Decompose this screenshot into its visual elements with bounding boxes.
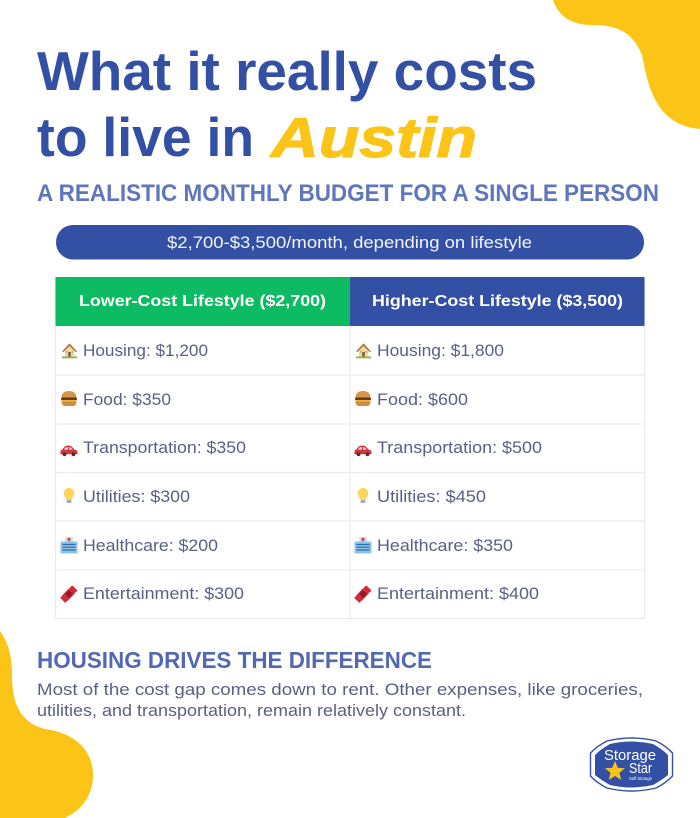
header: lower-cost lifestyle: [56, 277, 350, 326]
table body frame: [55, 278, 645, 619]
budget range pill: $2,700-$3,500/month, depending on lifestyle: [167, 233, 532, 252]
row: transportation higher: Transportation: $500: [377, 438, 542, 457]
body text: utilities, and transportation, remain relatively constant.: [37, 701, 466, 720]
row: utilities lower: Utilities: $300: [83, 487, 190, 506]
header: higher-cost lifestyle: Higher-Cost Lifestyle ($3,500): [372, 293, 623, 310]
logo: Storage Star: Self Storage: [629, 776, 652, 781]
body text: Most of the cost gap comes down to rent. Other expenses, like groceries,: [37, 680, 643, 699]
row: healthcare lower: Healthcare: $200: [83, 536, 218, 555]
decorative blob: bottom left: [0, 631, 93, 818]
title: Austin: [269, 106, 477, 169]
header: lower-cost lifestyle: Lower-Cost Lifestyle ($2,700): [79, 293, 326, 310]
row: housing higher: Housing: $1,800: [377, 341, 504, 360]
decorative blob: top right: [553, 0, 700, 129]
row: healthcare higher: Healthcare: $350: [377, 536, 513, 555]
comparison table: [55, 277, 645, 619]
logo: Storage Star: Storage: [604, 747, 656, 764]
row: food lower: Food: $350: [83, 390, 171, 409]
header: higher-cost lifestyle: [350, 277, 644, 326]
subtitle: A REALISTIC MONTHLY BUDGET FOR A SINGLE PERSON: [37, 180, 659, 207]
title: [37, 40, 537, 169]
logo star: [605, 761, 625, 780]
title: What it really costs: [37, 40, 537, 102]
row: entertainment lower: Entertainment: $300: [83, 584, 244, 603]
logo: Storage Star: [590, 738, 672, 791]
row: entertainment higher: Entertainment: $400: [377, 584, 539, 603]
section heading: HOUSING DRIVES THE DIFFERENCE: [37, 647, 432, 673]
budget range pill: [56, 225, 644, 260]
row: food higher: Food: $600: [377, 390, 468, 409]
logo: Storage Star: Star: [629, 760, 652, 777]
row: transportation lower: Transportation: $350: [83, 438, 246, 457]
row: housing lower: Housing: $1,200: [83, 341, 208, 360]
title: to live in: [37, 106, 254, 168]
row: utilities higher: Utilities: $450: [377, 487, 486, 506]
body text: [37, 680, 643, 720]
